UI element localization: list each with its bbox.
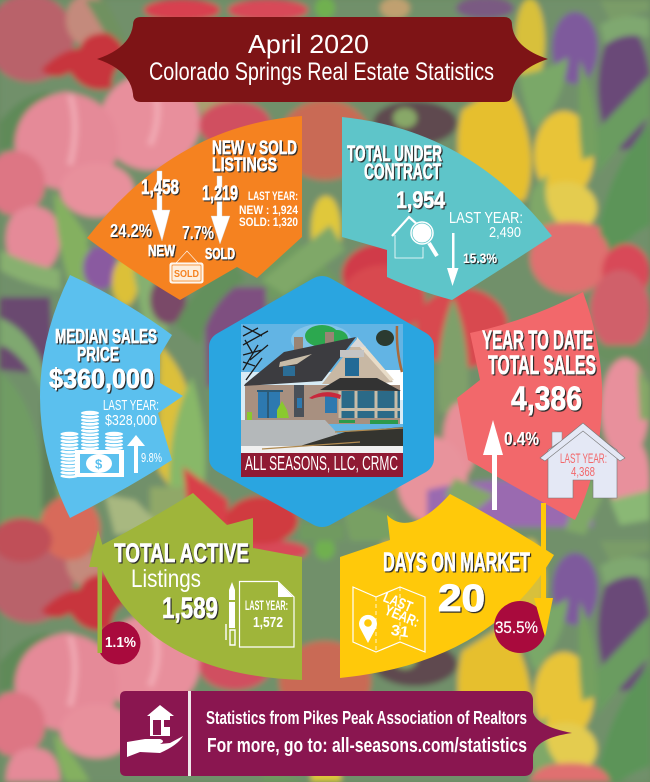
footer banner — [120, 691, 572, 776]
icon: document with last year: LAST YEAR: — [245, 597, 288, 613]
heading: SOLD — [205, 246, 235, 263]
last year: 2,490 — [489, 224, 521, 241]
arrow: sold listings — [211, 176, 230, 244]
illustration: house — [241, 324, 403, 454]
icon: house with last year: LAST YEAR: — [560, 450, 607, 466]
last year figures: NEW : 1,924 — [239, 205, 299, 217]
panel: total under contract — [342, 117, 552, 300]
logo caption: ALL SEASONS, LLC, CRMC — [245, 453, 398, 475]
heading: 7.7% — [182, 222, 214, 243]
heading: 1,219 — [202, 182, 238, 205]
heading and value: 20 — [438, 578, 485, 620]
heading and value: CONTRACT — [364, 159, 441, 184]
arrow: down — [534, 503, 553, 637]
circle: percent change — [494, 601, 546, 653]
icon: map with last year: 31 — [390, 622, 410, 641]
circle: percent change — [98, 622, 140, 664]
last year: LAST YEAR: — [449, 210, 523, 227]
icon: document with last year: 1,572 — [253, 614, 283, 631]
logo caption — [241, 453, 403, 477]
heading and value: 15.3% — [463, 250, 497, 266]
divider — [188, 691, 191, 776]
last year figures: SOLD: 1,320 — [239, 217, 298, 229]
panel: days on market — [340, 494, 554, 678]
heading: 24.2% — [110, 220, 152, 241]
icon: map with last year: YEAR: — [382, 602, 422, 631]
heading — [110, 137, 297, 263]
icon: map with last year: LAST — [381, 589, 415, 616]
heading and value — [49, 326, 157, 394]
icon: coins and bill: $ — [95, 456, 103, 472]
icon: house with last year: 4,368 — [571, 464, 595, 479]
heading and value: TOTAL ACTIVE — [114, 538, 249, 568]
heading: NEW v SOLD — [212, 137, 297, 159]
heading and value: 0.4% — [504, 429, 539, 449]
subheading: Listings — [131, 565, 201, 593]
icon: house with magnifier — [392, 217, 437, 258]
heading: LISTINGS — [212, 154, 277, 176]
arrow: up — [89, 530, 109, 653]
icon: pen — [226, 582, 235, 645]
percent text: 35.5% — [495, 618, 538, 637]
percent text: 1.1% — [105, 634, 136, 651]
last year figures — [239, 191, 299, 229]
title banner: April 2020 — [248, 29, 369, 59]
heading and value: MEDIAN SALES — [55, 326, 157, 348]
arrow: down — [447, 233, 458, 286]
heading and value: DAYS ON MARKET — [383, 547, 530, 577]
heading and value: $360,000 — [49, 363, 154, 394]
panel: year to date total sales — [457, 292, 625, 520]
heading and value: 1,954 — [396, 187, 446, 214]
percent change: 9.8% — [141, 450, 162, 465]
title banner — [97, 17, 548, 102]
icon: document with last year — [240, 582, 294, 647]
arrow: up — [127, 435, 145, 473]
panel: median sales price — [40, 275, 183, 518]
icon: sold sign — [170, 251, 203, 283]
icon: house in hand — [127, 705, 183, 757]
last year — [449, 210, 523, 241]
heading and value: TOTAL UNDER — [347, 141, 442, 166]
footer text: For more, go to: all-seasons.com/statistics — [207, 734, 527, 757]
last year figures: LAST YEAR: — [248, 191, 298, 203]
heading and value — [114, 538, 249, 625]
footer text — [206, 707, 527, 757]
heading and value: 1,589 — [162, 592, 218, 625]
icon: map with last year — [353, 587, 425, 652]
arrow: new listings — [152, 171, 170, 241]
heading and value — [482, 325, 596, 449]
last year: LAST YEAR: — [103, 397, 159, 414]
icon: coins and bill — [60, 410, 124, 479]
footer text: Statistics from Pikes Peak Association of Realtors — [206, 707, 527, 728]
title banner: Colorado Springs Real Estate Statistics — [149, 58, 494, 86]
panel: new v sold listings — [87, 116, 302, 300]
arrow: up — [483, 420, 503, 510]
heading and value — [347, 141, 497, 266]
last year: $328,000 — [105, 412, 157, 429]
heading and value: 4,386 — [511, 380, 582, 418]
heading: NEW — [148, 243, 175, 260]
icon: sold sign: SOLD — [174, 268, 199, 280]
panel: company logo — [209, 276, 434, 527]
heading and value — [383, 547, 530, 620]
last year — [103, 397, 159, 429]
heading and value: PRICE — [77, 344, 119, 366]
panel: total active listings — [89, 493, 302, 680]
heading: 1,458 — [141, 176, 179, 199]
icon: house with last year — [540, 423, 625, 498]
